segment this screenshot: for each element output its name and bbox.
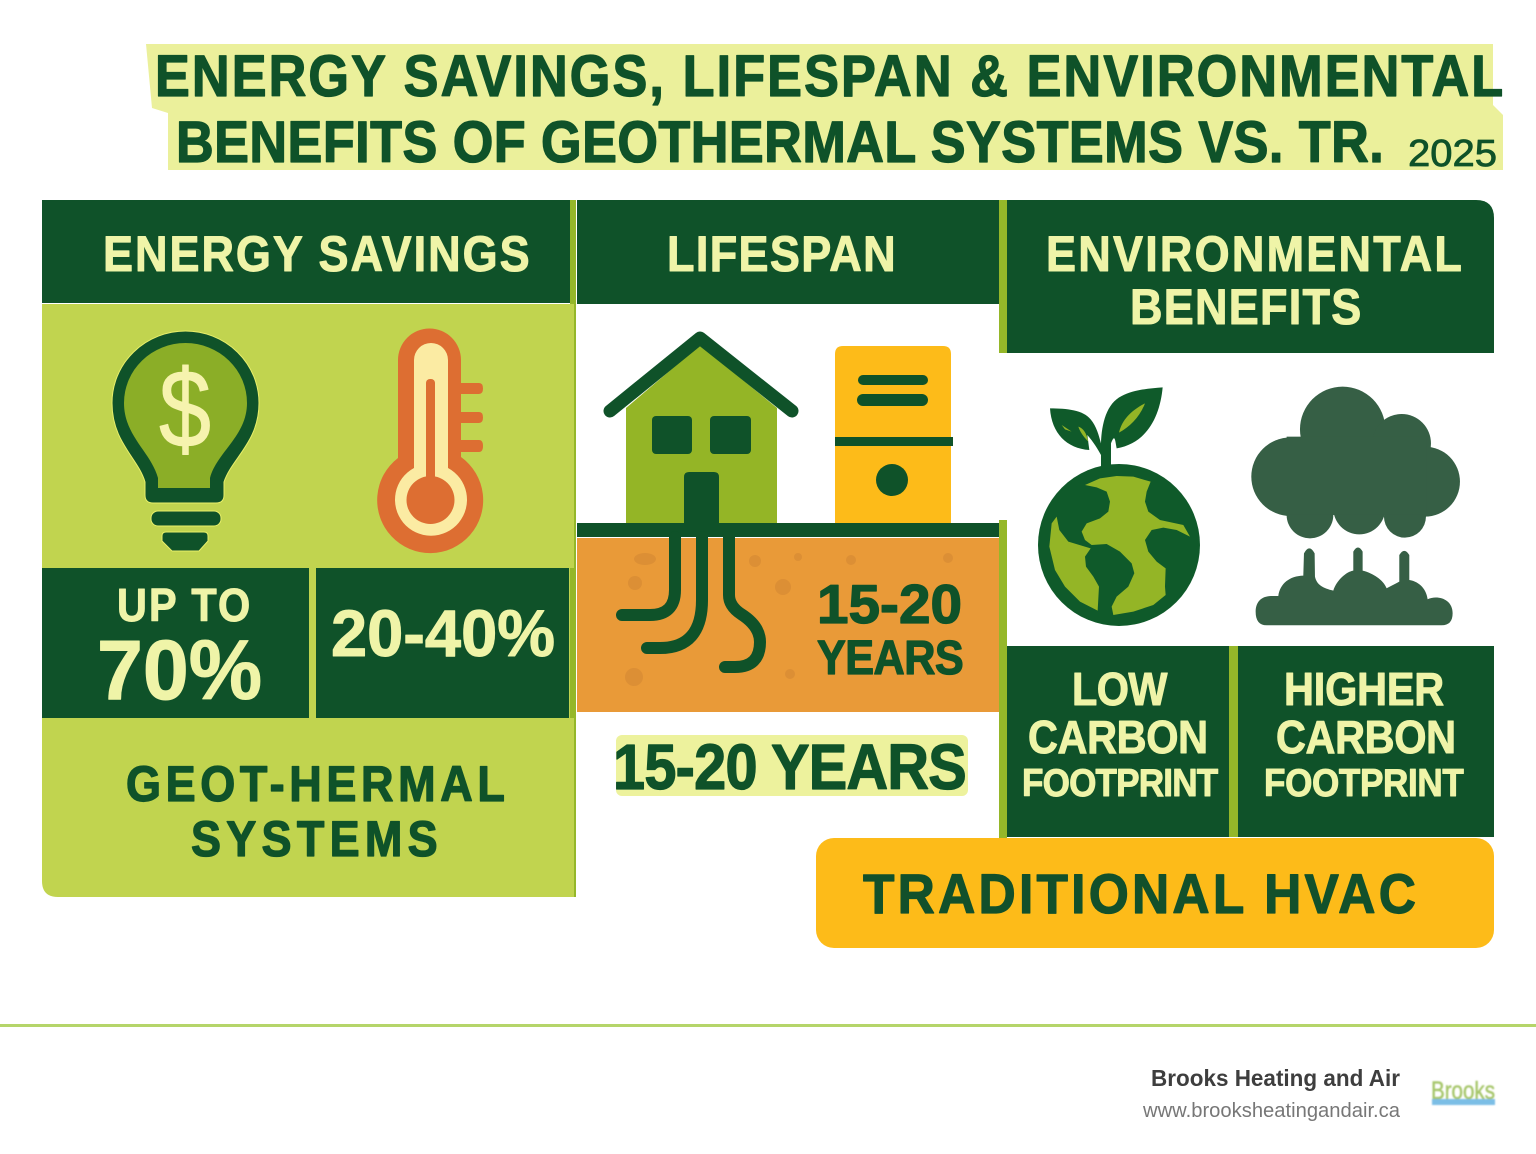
title: BENEFITS OF GEOTHERMAL SYSTEMS VS. TR. — [176, 109, 1384, 175]
label: geothermal systems: SYSTEMS — [191, 812, 438, 868]
footer company text — [1142, 1065, 1401, 1122]
panel: environmental benefits — [999, 200, 1494, 838]
footer company text: www.brooksheatingandair.ca — [1142, 1100, 1401, 1122]
text: soil lifespan: YEARS — [817, 631, 964, 685]
icon: traditional unit — [835, 346, 953, 523]
stat: higher carbon footprint — [1238, 646, 1494, 837]
icon: smog cloud and factory — [1251, 387, 1460, 625]
icon: geothermal pipes — [622, 537, 760, 667]
panel: lifespan — [577, 200, 999, 803]
stat: low carbon footprint: LOW — [1072, 664, 1168, 716]
stat: 20-40%: 20-40% — [331, 596, 555, 670]
stat: up to 70%: UP TO — [117, 580, 250, 632]
heading: environmental benefits: BENEFITS — [1130, 280, 1361, 336]
icon: thermometer — [377, 328, 483, 553]
stat: low carbon footprint: FOOTPRINT — [1022, 760, 1219, 804]
text: soil lifespan — [817, 573, 964, 685]
stat: low carbon footprint — [1007, 646, 1229, 837]
label: geothermal systems: GEOT-HERMAL — [126, 757, 505, 813]
stat: low carbon footprint: CARBON — [1028, 712, 1208, 764]
text: soil lifespan: 15-20 — [817, 573, 962, 635]
label: traditional hvac: TRADITIONAL HVAC — [863, 863, 1416, 925]
stat: higher carbon footprint: CARBON — [1276, 712, 1456, 764]
heading: energy savings: ENERGY SAVINGS — [103, 227, 530, 283]
heading: energy savings — [42, 200, 570, 303]
heading: environmental benefits — [1007, 200, 1494, 353]
stat: up to 70%: 70% — [97, 623, 262, 717]
title — [146, 43, 1503, 175]
stat: higher carbon footprint: FOOTPRINT — [1264, 760, 1464, 804]
stat: 20-40% — [316, 568, 569, 718]
title: ENERGY SAVINGS, LIFESPAN & ENVIRONMENTAL — [155, 43, 1503, 109]
icon: earth with sprout — [1038, 387, 1200, 626]
panel: energy savings — [42, 200, 576, 897]
footer logo: Brooks — [1431, 1077, 1495, 1105]
icon: light bulb with dollar — [112, 331, 259, 551]
ground with soil — [577, 523, 999, 712]
title: 2025 — [1408, 133, 1497, 175]
heading: environmental benefits: ENVIRONMENTAL — [1046, 227, 1462, 283]
icon: light bulb with dollar: $ — [159, 348, 211, 471]
heading: lifespan — [577, 200, 999, 304]
heading: lifespan: LIFESPAN — [667, 227, 896, 283]
label: traditional hvac — [816, 838, 1494, 948]
stat: up to 70% — [42, 568, 309, 718]
footer company text: Brooks Heating and Air — [1151, 1065, 1400, 1091]
icon: house — [610, 338, 792, 523]
callout: 15-20 years: 15-20 YEARS — [613, 731, 967, 803]
label: geothermal systems — [126, 757, 505, 868]
stat: higher carbon footprint: HIGHER — [1284, 664, 1444, 716]
